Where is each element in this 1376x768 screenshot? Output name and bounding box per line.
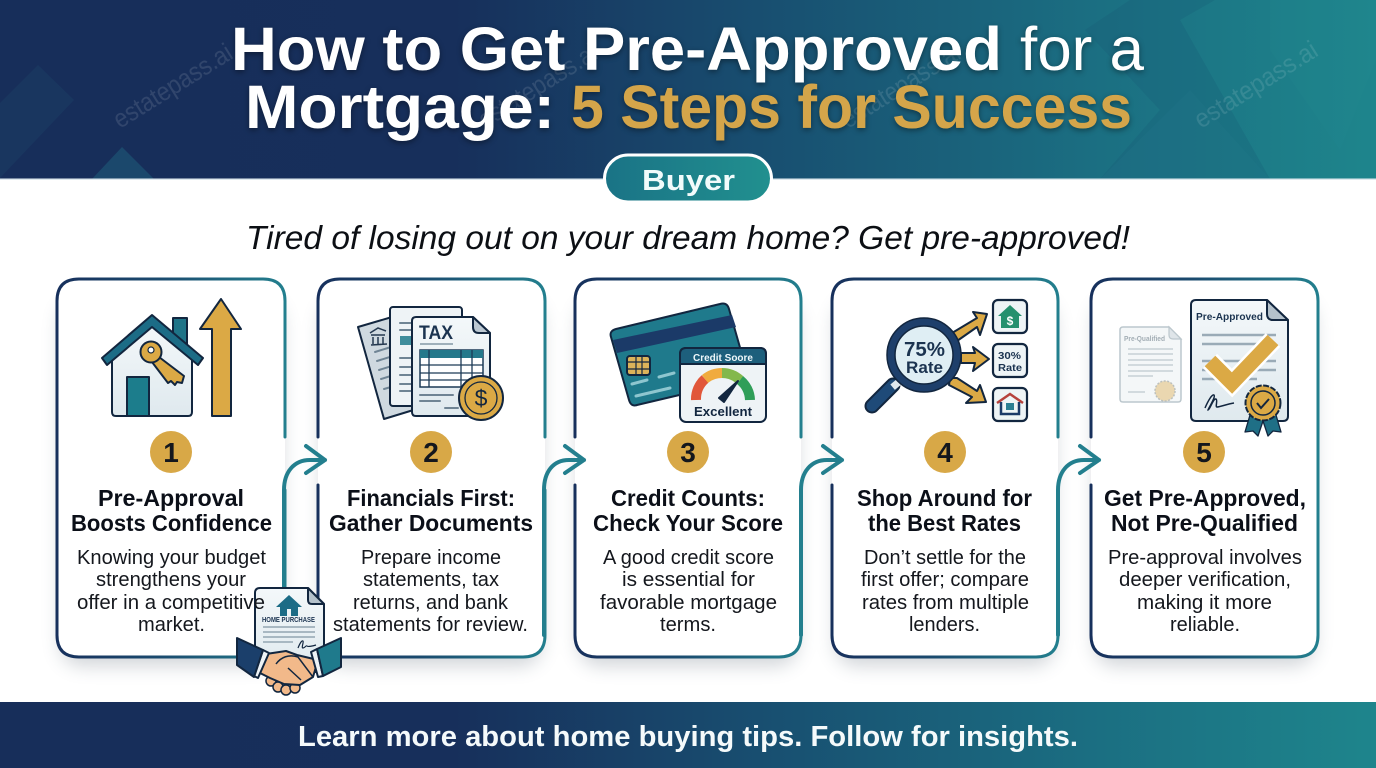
icon: tax documents and coin: $ bbox=[475, 385, 488, 411]
text: step 4: rates from multiple bbox=[862, 592, 1029, 614]
icon: credit card with score gauge: Excellent bbox=[694, 405, 753, 419]
arrow: step 1 to 2 bbox=[284, 446, 325, 600]
text: step 2: returns, and bank bbox=[353, 592, 509, 614]
icon: tax documents and coin: TAX bbox=[419, 323, 453, 344]
heading: step 1: Pre-Approval bbox=[98, 485, 244, 511]
icon: magnifier comparing rates: 30% bbox=[998, 350, 1022, 362]
card shadows bbox=[60, 300, 1315, 666]
icon: pre-qualified and pre-approved documents: Pre-Approved bbox=[1196, 311, 1263, 323]
icon: magnifier comparing rates: Rate bbox=[998, 362, 1022, 374]
text: step 2: statements, tax bbox=[363, 569, 499, 591]
footer banner bbox=[0, 702, 1376, 768]
icon: pre-qualified and pre-approved documents bbox=[1120, 300, 1288, 436]
heading: step 5: Not Pre-Qualified bbox=[1111, 510, 1298, 536]
heading: step 1: Boosts Confidence bbox=[71, 510, 272, 536]
badge: Buyer bbox=[604, 155, 772, 202]
text: step 5: Pre-approval involves bbox=[1108, 547, 1302, 569]
title: 5 Steps for Success bbox=[571, 73, 1132, 141]
heading: step 1 bbox=[71, 485, 272, 536]
icon: credit card with score gauge: Credit Soore bbox=[693, 353, 753, 364]
text: step 4: first offer; compare bbox=[861, 569, 1029, 591]
step number 5: 5 bbox=[1196, 437, 1212, 468]
heading: step 3: Credit Counts: bbox=[611, 485, 765, 511]
heading: step 2: Financials First: bbox=[347, 485, 515, 511]
text: step 4 bbox=[861, 547, 1029, 636]
title: Mortgage: bbox=[245, 73, 555, 141]
heading: step 3: Check Your Score bbox=[593, 510, 783, 536]
text: step 1 bbox=[77, 547, 266, 636]
title: How to Get Pre-Approved bbox=[231, 15, 1002, 83]
icon: pre-qualified and pre-approved documents: Pre-Qualified bbox=[1124, 336, 1165, 343]
step number 3: 3 bbox=[680, 437, 696, 468]
text: step 1: offer in a competitive bbox=[77, 592, 265, 614]
icon: magnifier comparing rates: Rate bbox=[906, 359, 943, 377]
subtitle: Tired of losing out on your dream home? Get pre-approved! bbox=[246, 219, 1130, 256]
icon: magnifier comparing rates: 75% bbox=[904, 339, 945, 361]
panel: step 5 bbox=[1091, 279, 1318, 657]
step number 2: 2 bbox=[423, 437, 439, 468]
arrow: step 4 to 5 bbox=[1058, 446, 1099, 635]
text: step 2: Prepare income bbox=[361, 547, 501, 569]
icon: magnifier comparing rates bbox=[872, 300, 1027, 421]
title bbox=[231, 15, 1144, 141]
arrow: step 2 to 3 bbox=[544, 446, 584, 635]
panel: step 1 bbox=[57, 279, 285, 657]
icon: credit card with score gauge bbox=[611, 304, 766, 422]
badge: Buyer: Buyer bbox=[642, 165, 735, 197]
icon: tax documents and coin bbox=[358, 307, 503, 420]
arrow: step 3 to 4 bbox=[801, 446, 842, 635]
icon: handshake over home purchase document bbox=[237, 588, 341, 695]
text: step 3: is essential for bbox=[622, 569, 755, 591]
watermarks: estatepass.ai bbox=[835, 37, 966, 134]
title: for a bbox=[1020, 15, 1144, 83]
text: step 4: Don’t settle for the bbox=[864, 547, 1026, 569]
watermarks: estatepass.ai bbox=[1188, 34, 1323, 134]
heading: step 5: Get Pre-Approved, bbox=[1104, 485, 1306, 511]
text: step 4: lenders. bbox=[909, 614, 980, 636]
heading: step 2: Gather Documents bbox=[329, 510, 533, 536]
step number 1 bbox=[150, 431, 192, 473]
text: step 3: terms. bbox=[660, 614, 716, 636]
text: step 5: reliable. bbox=[1170, 614, 1240, 636]
text: step 1: Knowing your budget bbox=[77, 547, 266, 569]
heading: step 4: Shop Around for bbox=[857, 485, 1032, 511]
header banner bbox=[0, 0, 1376, 180]
text: step 5: deeper verification, bbox=[1119, 569, 1291, 591]
footer banner: Learn more about home buying tips. Follow for insights. bbox=[298, 721, 1078, 753]
step number 3 bbox=[667, 431, 709, 473]
text: step 1: market. bbox=[138, 614, 205, 636]
step number 4 bbox=[924, 431, 966, 473]
icon: magnifier comparing rates: $ bbox=[1007, 314, 1014, 328]
panel: step 4 bbox=[832, 279, 1058, 657]
heading: step 4 bbox=[857, 485, 1032, 536]
step number 1: 1 bbox=[163, 437, 179, 468]
panel: step 2 bbox=[318, 279, 545, 657]
text: step 3: A good credit score bbox=[603, 547, 774, 569]
watermarks: estatepass.ai bbox=[107, 37, 238, 134]
text: step 2: statements for review. bbox=[333, 614, 528, 636]
watermarks bbox=[107, 34, 1323, 134]
heading: step 5 bbox=[1104, 485, 1306, 536]
text: step 5: making it more bbox=[1137, 592, 1272, 614]
icon: handshake over home purchase document: HOME PURCHASE bbox=[262, 615, 315, 624]
text: step 1: strengthens your bbox=[96, 569, 246, 591]
text: step 5 bbox=[1108, 547, 1302, 636]
heading: step 4: the Best Rates bbox=[868, 510, 1021, 536]
icon: house with key and up arrow bbox=[102, 299, 241, 416]
text: step 2 bbox=[333, 547, 528, 636]
step number 2 bbox=[410, 431, 452, 473]
heading: step 3 bbox=[593, 485, 783, 536]
text: step 3 bbox=[600, 547, 777, 636]
panel: step 3 bbox=[575, 279, 801, 657]
watermarks: estatepass.ai bbox=[472, 37, 603, 134]
step number 5 bbox=[1183, 431, 1225, 473]
step number 4: 4 bbox=[937, 437, 953, 468]
text: step 3: favorable mortgage bbox=[600, 592, 777, 614]
heading: step 2 bbox=[329, 485, 533, 536]
